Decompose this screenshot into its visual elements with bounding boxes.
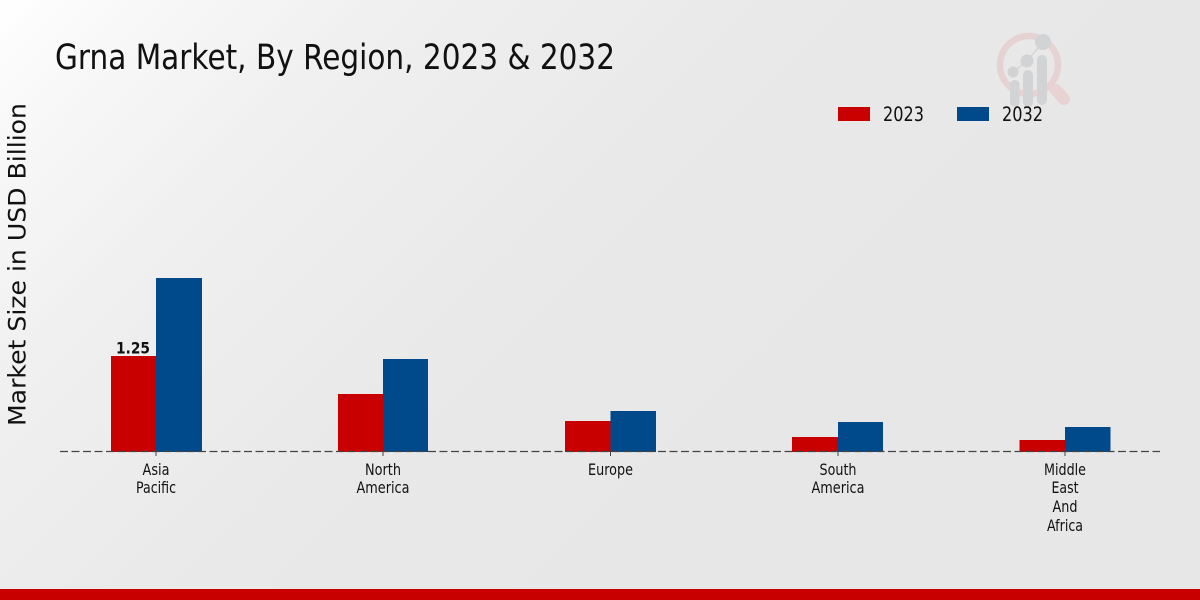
label: Asia Pacific: Asia [142, 460, 170, 479]
footer bar [0, 589, 1200, 600]
legend [838, 103, 1043, 126]
legend label 2032: 2032 [1002, 103, 1043, 126]
bars: Europe [565, 411, 656, 452]
bars: South America [792, 422, 883, 452]
label: South America: America [812, 478, 864, 497]
label: North America: North [365, 460, 401, 479]
y axis label: Market Size in USD Billion [4, 103, 32, 426]
x axis labels [136, 460, 1086, 535]
value label: 1.25 [116, 338, 150, 358]
bars: Asia Pacific [111, 278, 202, 452]
legend swatch 2032 [957, 107, 989, 121]
bar chart [60, 278, 1160, 456]
label: Middle East And Africa: East [1052, 478, 1078, 497]
legend swatch 2023 [838, 107, 870, 121]
x axis baseline [60, 450, 1160, 452]
bars: North America [338, 359, 428, 452]
label: Middle East And Africa: Africa [1047, 516, 1083, 535]
bars: Middle East And Africa [1020, 427, 1110, 452]
label: South America: South [820, 460, 856, 479]
legend label 2023: 2023 [883, 103, 924, 126]
icon: magnifier logo watermark [1000, 34, 1064, 107]
label: Asia Pacific: Pacific [136, 478, 176, 497]
title: Grna Market, By Region, 2023 & 2032 [55, 38, 615, 78]
label: Middle East And Africa: Middle [1044, 460, 1086, 479]
label: Europe: Europe [588, 460, 633, 479]
label: Middle East And Africa: And [1052, 497, 1078, 516]
label: North America: America [356, 478, 410, 497]
